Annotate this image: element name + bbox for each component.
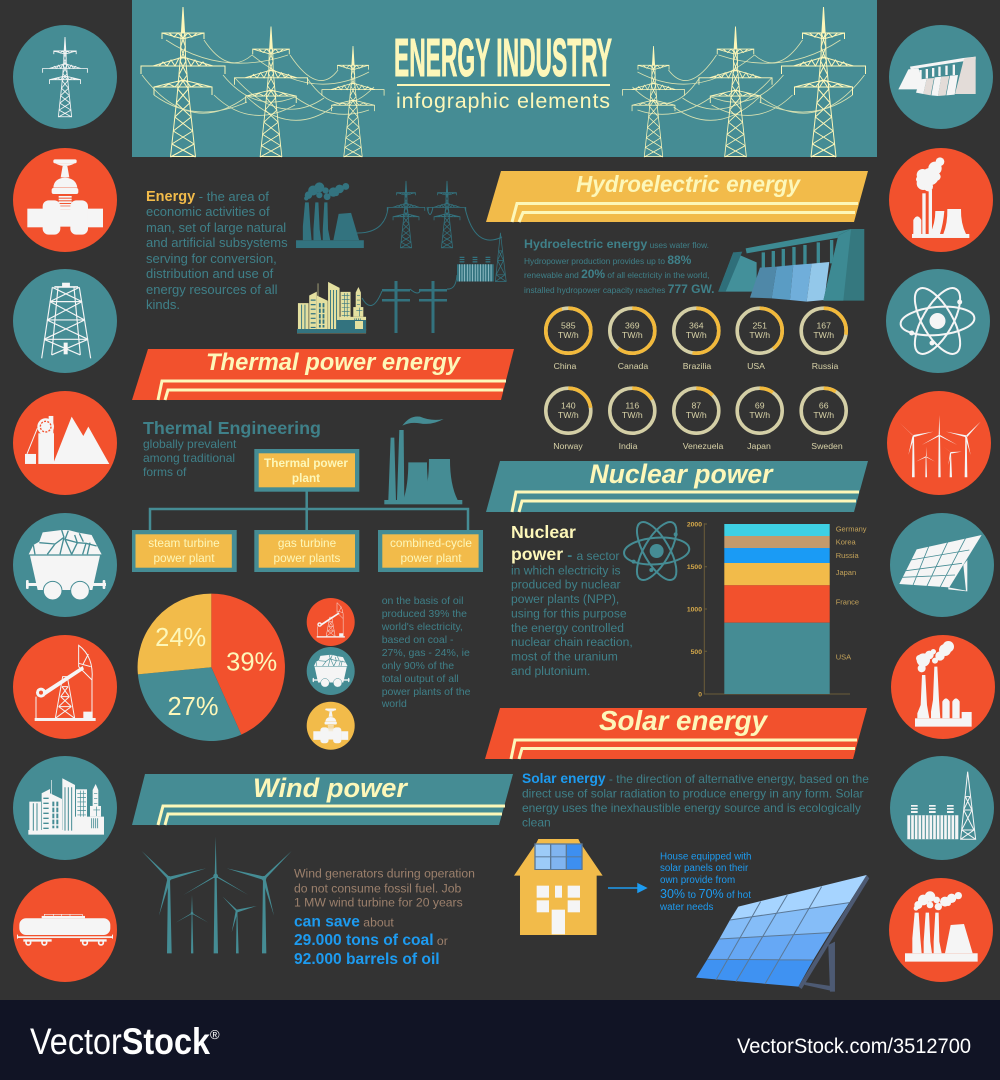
donut: India: [610, 388, 655, 451]
donut: Japan: 69: [755, 400, 765, 410]
box: thermal power plant: [254, 449, 359, 492]
text: wind power: about: [360, 916, 394, 930]
text: energy definition: distribution and use of: [146, 266, 274, 281]
donut: India: 116: [625, 400, 639, 410]
icon: atom: [886, 269, 990, 373]
icon: utility poles: [382, 281, 447, 333]
text: hydroelectric facts: Hydropower production provides up to: [524, 256, 667, 266]
donut: Sweden: Sweden: [811, 441, 843, 451]
icon: mine and mountains: [13, 391, 117, 495]
text: thermal engineering: Thermal Engineering: [143, 418, 321, 438]
donut: Norway: TW/h: [558, 410, 579, 420]
icon: solar panel: [890, 513, 994, 617]
text: solar energy: direct use of solar radiation to produce energy in any form. Solar: [522, 787, 864, 801]
text: fuel mix description: 27%, gas - 24%, ie: [382, 647, 470, 659]
text: wind power: Wind generators during operation: [294, 867, 475, 881]
donut: USA: [737, 308, 782, 371]
text: thermal engineering: forms of: [143, 465, 187, 479]
text: fuel mix description: total output of all: [382, 673, 459, 685]
icon: coal: [307, 647, 355, 695]
icon: city: [13, 756, 117, 860]
box: combined-cycle: power plant: [400, 551, 462, 565]
text: hydroelectric facts: installed hydropower capacity reaches: [524, 285, 668, 295]
text: nuclear power: nuclear chain reaction,: [511, 635, 633, 649]
donut: Canada: TW/h: [622, 330, 643, 340]
box: thermal power plant: Thermal power: [264, 456, 348, 470]
donut: Venezuela: TW/h: [686, 410, 707, 420]
donut: Japan: TW/h: [749, 410, 770, 420]
donut: Sweden: TW/h: [813, 410, 834, 420]
axis labels: 0: [698, 692, 702, 698]
icon: coal cart: [13, 513, 117, 617]
axis labels: 500: [691, 649, 702, 656]
text: thermal engineering: among traditional: [143, 451, 235, 465]
donut: Norway: 140: [561, 400, 576, 410]
country labels: Germany: [836, 525, 867, 534]
text: fuel mix description: produced 39% the: [382, 608, 467, 620]
text: fuel mix description: based on coal -: [382, 634, 454, 646]
box: gas turbine: gas turbine: [278, 536, 337, 550]
donut: Brazilia: [674, 308, 719, 371]
icon: power tower: [13, 25, 117, 129]
donut: Brazilia: Brazilia: [683, 361, 711, 371]
donut: Canada: 369: [625, 320, 640, 330]
country labels: France: [836, 597, 859, 606]
box: thermal power plant: plant: [292, 471, 320, 485]
text: energy definition: energy resources of all: [146, 282, 278, 297]
box: gas turbine: [254, 530, 359, 572]
text: fuel mix description: power plants of the: [382, 686, 471, 698]
country labels: Russia: [836, 551, 859, 560]
pie chart: fuel mix: 39%: [226, 649, 277, 677]
header banner: ENERGY INDUSTRY: [394, 28, 612, 88]
text: energy definition: economic activities of: [146, 204, 270, 219]
banner: nuclear power: [486, 459, 868, 512]
donut: Venezuela: Venezuela: [683, 441, 723, 451]
box: gas turbine: power plants: [274, 551, 341, 565]
text: wind power: 92.000 barrels of oil: [294, 951, 440, 968]
footer bar: VectorStock: [30, 1021, 210, 1062]
icon: city: [297, 282, 366, 333]
text: nuclear power: power: [511, 544, 563, 564]
donut: Venezuela: 87: [691, 400, 701, 410]
icon: oil: [307, 598, 355, 646]
donut: Sweden: 66: [819, 400, 829, 410]
banner: solar energy: [485, 705, 867, 759]
icon: atom: [623, 516, 690, 586]
icon: oil derrick: [13, 269, 117, 373]
icon: chimneys and smoke: [891, 635, 995, 739]
text: solar energy: Solar energy: [522, 771, 606, 786]
icon: dam: [889, 25, 993, 129]
text: house solar callout: to 70% of hot: [688, 887, 751, 901]
illustration: solar panel: [696, 875, 869, 992]
donut: USA: TW/h: [749, 330, 770, 340]
country labels: Korea: [836, 537, 857, 546]
text: energy definition: kinds.: [146, 297, 180, 312]
text: energy definition: man, set of large natural: [146, 220, 286, 235]
donut: USA: USA: [747, 361, 765, 371]
footer bar: [0, 1000, 1000, 1080]
donut: Russia: Russia: [812, 361, 838, 371]
text: energy definition: Energy: [146, 189, 195, 205]
banner: hydroelectric energy: [486, 171, 868, 222]
donut charts: hydro production by country: [546, 308, 846, 451]
right icon column: [886, 25, 995, 982]
power lines: [357, 207, 502, 306]
icon: rail tank wagon: [13, 878, 117, 982]
axis labels: 2000: [687, 522, 702, 528]
illustration: hydro dam: [718, 229, 864, 302]
text: nuclear power: produced by nuclear: [511, 578, 621, 592]
text: wind power: [294, 867, 475, 968]
donut: India: India: [619, 441, 638, 451]
text: hydroelectric facts: 20% of all electricity in the world,: [581, 267, 709, 281]
banner: thermal power energy: [132, 349, 514, 400]
text: thermal engineering: globally prevalent: [143, 437, 237, 451]
axis labels: [687, 522, 702, 698]
icon: oil pump jack: [13, 635, 117, 739]
text: nuclear power: using for this purpose: [511, 606, 627, 620]
text: hydroelectric facts: 777 GW.: [668, 282, 714, 296]
icon: pipe valve: [13, 148, 117, 252]
left icon column: [13, 25, 117, 982]
flow chart: thermal power plants: [132, 449, 483, 572]
box: steam turbine: steam turbine: [148, 536, 220, 550]
text: nuclear power: the energy controlled: [511, 621, 624, 635]
donut: Russia: 167: [816, 320, 831, 330]
box: steam turbine: power plant: [154, 551, 215, 565]
icon: power plant with smoke: [889, 148, 993, 252]
country labels: Japan: [836, 568, 856, 577]
energy chain diagram: [296, 181, 506, 333]
icon: twin towers: [387, 181, 466, 248]
illustration: house with solar panels: [514, 839, 603, 935]
text: fuel mix description: world: [381, 698, 407, 710]
banner: hydroelectric energy: Hydroelectric energy: [576, 171, 802, 197]
box: steam turbine: [132, 530, 237, 572]
text: house solar callout: own provide from: [660, 875, 735, 886]
icon: wind turbines: [887, 391, 991, 495]
box: combined-cycle: [378, 530, 483, 572]
country labels: USA: [836, 652, 851, 661]
text: solar energy: clean: [522, 816, 551, 830]
icon: thermal plant silhouette: [384, 416, 462, 504]
text: house solar callout: House equipped with: [660, 851, 752, 862]
arrow: [608, 884, 646, 892]
donut: Russia: [801, 308, 846, 371]
text: fuel mix description: on the basis of oil: [382, 595, 463, 607]
donut: Norway: Norway: [553, 441, 583, 451]
text: house solar callout: water needs: [659, 902, 713, 913]
bar segments: [724, 524, 830, 694]
donut: Venezuela: [674, 388, 723, 451]
box: combined-cycle: combined-cycle: [390, 536, 472, 550]
text: fuel mix description: only 90% of the: [382, 660, 454, 672]
text: hydroelectric facts: 88%: [667, 253, 692, 267]
text: nuclear power: power plants (NPP),: [511, 592, 619, 606]
donut: Japan: [737, 388, 782, 451]
text: nuclear power: most of the uranium: [511, 650, 618, 664]
donut: USA: 251: [752, 320, 767, 330]
text: wind power: 1 MW wind turbine for 20 years: [294, 896, 463, 910]
donut: Brazilia: 364: [689, 320, 704, 330]
text: energy definition: serving for conversion,: [146, 251, 277, 266]
icon: factory with cooling tower: [889, 878, 993, 982]
donut: China: TW/h: [558, 330, 579, 340]
donut: Norway: [546, 388, 591, 451]
text: energy definition: and artificial subsystems: [146, 235, 288, 250]
axes: [704, 523, 850, 694]
pie chart: fuel mix: 24%: [155, 624, 206, 652]
illustration: wind turbines: [142, 837, 292, 953]
text: solar energy: energy uses the inexhaustible energy source and is ecologically: [522, 801, 861, 815]
header banner: [132, 0, 877, 157]
text: house solar callout: solar panels on their: [660, 863, 749, 874]
donut: Canada: Canada: [618, 361, 648, 371]
icon: gas valve: [307, 702, 355, 750]
country labels: [836, 525, 867, 661]
banner: wind power: Wind power: [253, 773, 408, 803]
donut: Brazilia: TW/h: [686, 330, 707, 340]
donut: Canada: [610, 308, 655, 371]
subtitle: infographic elements: [396, 89, 610, 113]
donut: Sweden: [801, 388, 846, 451]
footer bar: VectorStock.com/3512700: [737, 1035, 971, 1058]
pie chart: fuel mix: [138, 594, 285, 741]
legend icons: oil, coal, gas: [307, 598, 355, 750]
text: fuel mix description: world's electricity,: [381, 621, 463, 633]
icon: factory: [296, 182, 364, 248]
axis labels: 1500: [687, 564, 702, 571]
text: solar energy: - the direction of alternative energy, based on the: [606, 772, 869, 786]
banner: thermal power energy: Thermal power energy: [206, 349, 462, 376]
pie chart: fuel mix: 27%: [167, 693, 219, 721]
text: wind power: do not consume fossil fuel. Job: [294, 881, 462, 895]
text: energy definition: - the area of: [195, 189, 269, 204]
text: nuclear power: in which electricity is: [511, 563, 621, 577]
text: hydroelectric facts: Hydroelectric energy: [524, 237, 647, 251]
footer bar: ®: [210, 1027, 220, 1042]
icon: transformer: [457, 233, 506, 282]
stacked bar chart: nuclear capacity: [687, 522, 867, 698]
text: nuclear power: and plutonium.: [511, 664, 590, 678]
banner: wind power: [132, 773, 513, 825]
banner: solar energy: Solar energy: [599, 705, 769, 736]
text: hydroelectric facts: uses water flow.: [647, 240, 709, 250]
text: hydroelectric facts: renewable and: [524, 270, 581, 280]
text: nuclear power: Nuclear: [511, 522, 576, 542]
donut: Russia: TW/h: [813, 330, 834, 340]
text: house solar callout: 30%: [660, 887, 685, 901]
donut: China: China: [554, 361, 577, 371]
text: wind power: 29.000 tons of coal: [294, 932, 434, 949]
banner: nuclear power: Nuclear power: [590, 459, 774, 489]
axis labels: 1000: [687, 606, 702, 614]
donut: China: 585: [561, 320, 576, 330]
text: nuclear power: - a sector: [567, 547, 619, 564]
text: thermal engineering: [143, 418, 321, 479]
icon: transformer and tower: [890, 756, 994, 860]
text: wind power: can save: [294, 914, 360, 931]
donut: Japan: Japan: [747, 441, 771, 451]
donut: China: [546, 308, 591, 371]
connectors: [150, 491, 468, 530]
donut: India: TW/h: [622, 410, 643, 420]
text: wind power: or: [434, 934, 448, 948]
